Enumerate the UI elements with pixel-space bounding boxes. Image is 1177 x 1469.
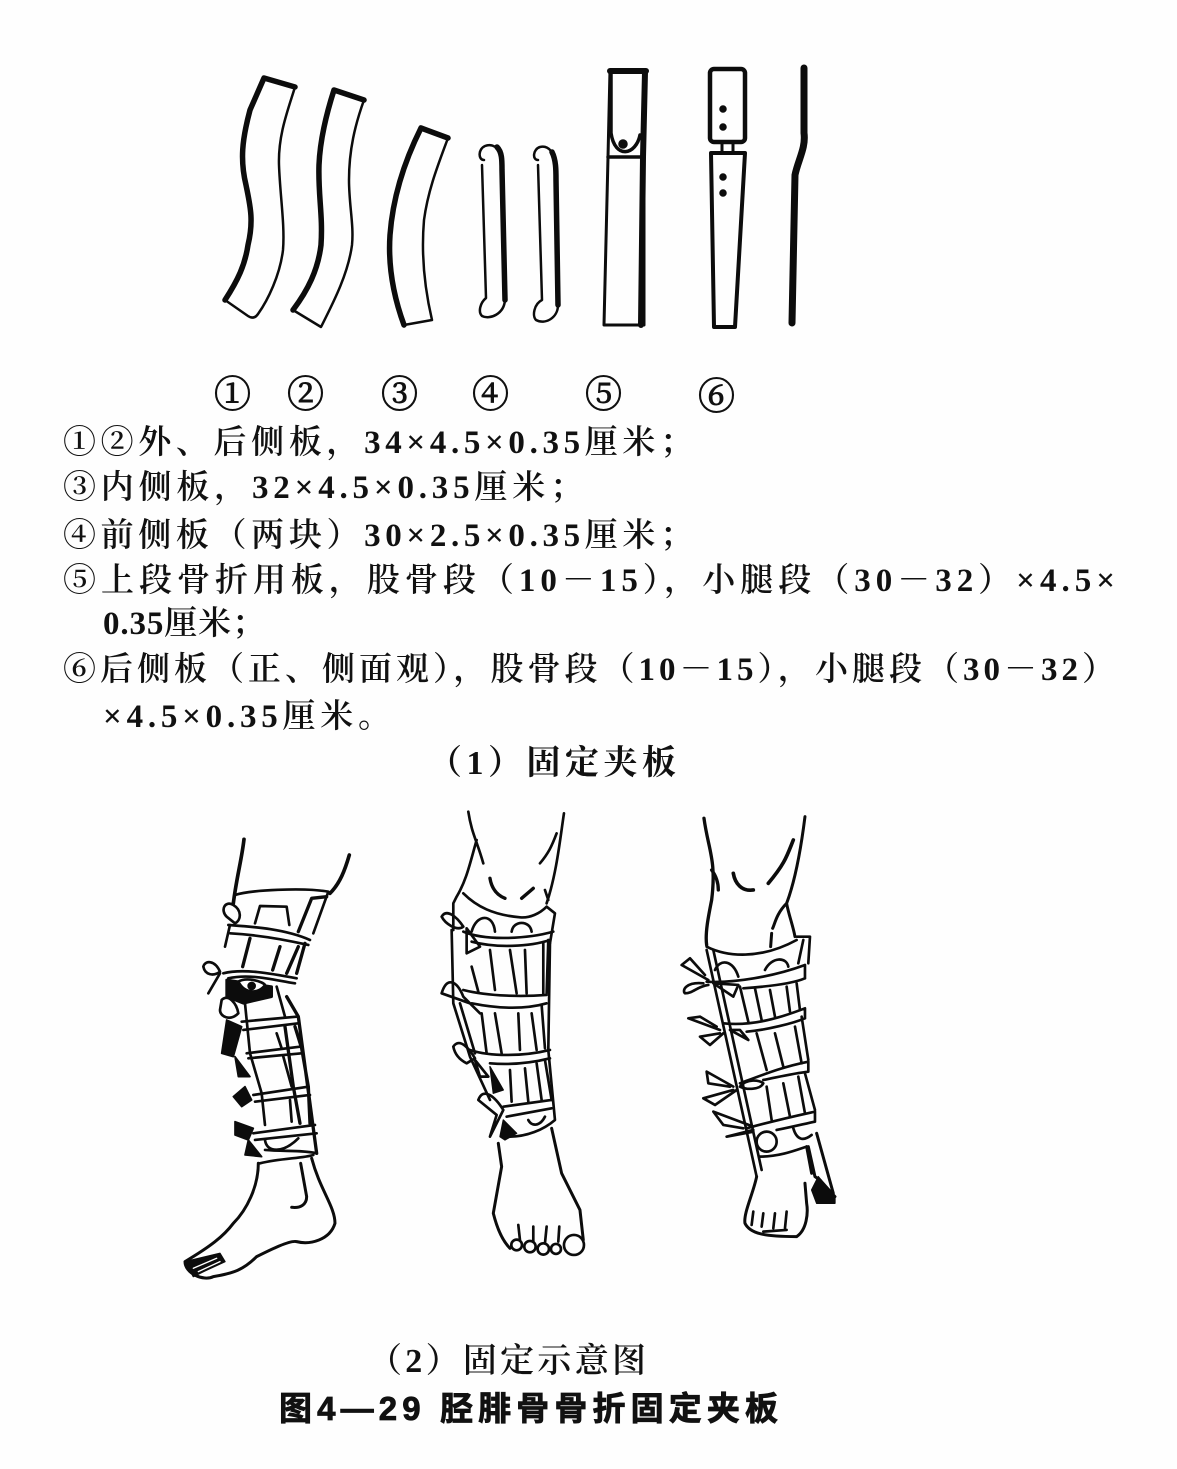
icon: board 4 front splint right xyxy=(534,147,558,322)
numbered board labels: ② xyxy=(287,374,324,416)
icon: board 6 rear splint front view xyxy=(710,69,745,327)
text block: board specifications: 0.35厘米； xyxy=(103,605,265,642)
text block: board specifications: ③内侧板，32×4.5×0.35厘米； xyxy=(63,469,583,506)
text block: board specifications: ④前侧板（两块）30×2.5×0.35厘米； xyxy=(63,517,693,554)
numbered board labels: ⑥ xyxy=(698,376,735,418)
heading: caption 1 fixed splints: （1）固定夹板 xyxy=(428,744,676,782)
heading: caption 2 fixation diagram: （2）固定示意图 xyxy=(368,1342,646,1380)
text block: board specifications: ×4.5×0.35厘米。 xyxy=(103,698,391,735)
text block: board specifications: ⑥后侧板（正、侧面观），股骨段（10－15），小腿段（30－32） xyxy=(63,651,1115,688)
numbered board labels: ④ xyxy=(472,374,509,416)
panel: splint boards xyxy=(225,68,804,327)
illustration: leg rear view xyxy=(682,817,835,1237)
icon: board 6 rear splint side view xyxy=(792,68,804,323)
icon: board 3 inner splint xyxy=(390,128,448,325)
text block: board specifications xyxy=(63,424,1115,735)
numbered board labels xyxy=(214,374,735,418)
illustration: leg side view xyxy=(185,839,349,1278)
icon: board 2 rear splint xyxy=(293,90,364,327)
numbered board labels: ① xyxy=(214,374,251,416)
numbered board labels: ⑤ xyxy=(585,374,622,416)
title: figure 4-29: 图4—29 胫腓骨骨折固定夹板 xyxy=(279,1390,778,1427)
illustration: leg front view xyxy=(442,812,584,1255)
numbered board labels: ③ xyxy=(381,374,418,416)
icon: board 1 outer splint xyxy=(225,78,295,318)
icon: board 4 front splint left xyxy=(480,145,505,317)
icon: board 5 upper fracture splint xyxy=(604,70,646,325)
panel: fixation illustration xyxy=(185,812,835,1278)
text block: board specifications: ①②外、后侧板，34×4.5×0.35厘米； xyxy=(63,424,693,461)
text block: board specifications: ⑤上段骨折用板，股骨段（10－15），小腿段（30－32）×4.5× xyxy=(63,562,1115,599)
